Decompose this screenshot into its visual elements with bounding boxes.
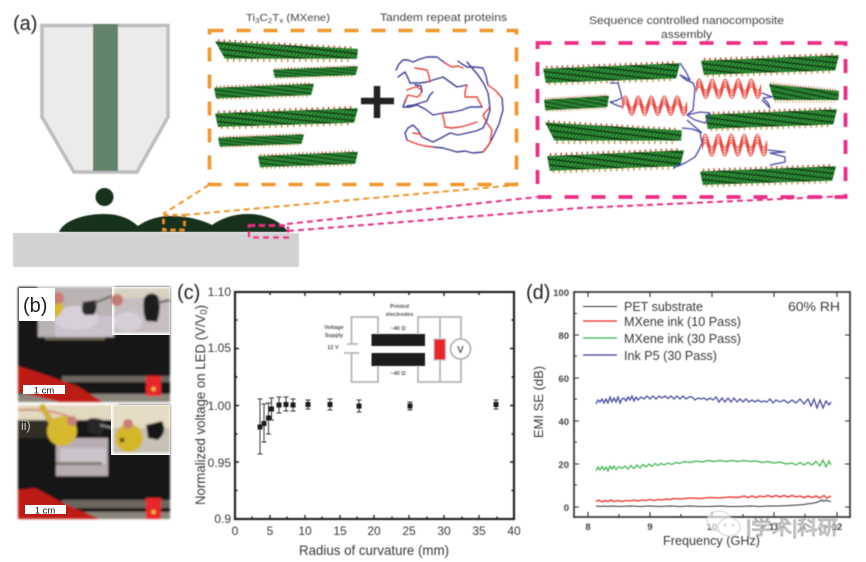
label b: (b) [23, 295, 47, 317]
y axis tick labels [208, 285, 231, 526]
circuit diagram inset: electrodes [386, 312, 413, 318]
x axis tick labels: 10 [707, 522, 717, 533]
y axis tick labels: 0 [564, 503, 569, 514]
panel label c: (c) [177, 282, 200, 304]
label b [19, 288, 55, 321]
panel c: voltage chart [177, 282, 521, 558]
x axis tick labels: 12 [832, 522, 842, 533]
data points with error bars [258, 397, 498, 454]
scale bar 1 cm [25, 505, 66, 516]
circuit diagram inset [324, 304, 470, 382]
y axis title: 0 [199, 309, 210, 315]
condition note: 60% RH [788, 299, 840, 314]
legend: MXene ink (10 Pass) [624, 315, 741, 329]
ink droplet [96, 188, 114, 206]
y axis tick labels: 100 [553, 288, 569, 299]
orange zoom box [164, 215, 184, 230]
nozzle [42, 24, 168, 172]
heading: MXene: T [272, 12, 280, 24]
x axis tick labels: 11 [769, 522, 780, 533]
y axis title: EMI SE (dB) [531, 366, 546, 438]
x axis tick labels: 0 [232, 524, 239, 538]
blue linkers [610, 63, 785, 168]
x axis title: Radius of curvature (mm) [299, 542, 449, 558]
heading: MXene: 3 [255, 16, 260, 25]
circuit diagram inset: ~40 Ω [390, 326, 406, 332]
series: Ink P5 30 pass [596, 396, 831, 408]
heading: MXene: Ti [246, 12, 254, 24]
watermark text: |学术|科研 [746, 517, 838, 539]
circuit diagram inset: ~40 Ω [390, 371, 406, 377]
panel label d: (d) [526, 282, 550, 304]
printed ink film [59, 214, 288, 232]
x axis tick labels: 40 [507, 524, 521, 538]
scale bar 1 cm: 1 cm [34, 386, 54, 396]
heading: MXene: x [279, 16, 284, 25]
y axis tick labels: 60 [558, 374, 569, 385]
heading: MXene: C [260, 12, 268, 24]
y axis tick labels [553, 288, 569, 514]
x axis tick labels: 5 [267, 524, 274, 538]
y axis tick labels: 1.05 [208, 341, 231, 355]
panel a: printing schematic and assembly [13, 12, 846, 267]
plus sign [361, 86, 394, 118]
scale bar 1 cm [23, 385, 65, 396]
y axis title: ) [192, 305, 208, 309]
x axis tick labels: 35 [472, 524, 486, 538]
circuit diagram inset: Supply [325, 333, 344, 339]
x axis tick labels [232, 524, 521, 538]
photo i [18, 287, 170, 402]
x axis tick labels: 15 [333, 524, 347, 538]
x axis tick labels: 25 [402, 524, 416, 538]
legend: PET substrate [624, 300, 703, 314]
heading: tandem repeat proteins: Tandem repeat proteins [380, 12, 508, 24]
orange dashed panel [210, 30, 516, 184]
circuit diagram inset: Voltage [324, 325, 344, 331]
y axis tick labels: 20 [558, 460, 569, 471]
orange connector lines [163, 185, 517, 215]
label ii: ii) [21, 419, 31, 433]
y axis tick labels: 40 [558, 417, 569, 428]
circuit diagram inset: Printed [390, 304, 409, 310]
x axis tick labels: 9 [647, 522, 653, 533]
series: PET substrate [596, 500, 831, 506]
pink connector lines [287, 196, 846, 231]
MXene sheets [214, 41, 358, 168]
y axis tick labels: 1.00 [208, 399, 231, 413]
panel b: photographs [18, 287, 170, 519]
x axis tick labels: 30 [437, 524, 451, 538]
legend: Ink P5 (30 Pass) [624, 349, 717, 363]
pink zoom box [249, 226, 288, 238]
series: MXene ink 10 pass [596, 496, 831, 502]
x axis title: Frequency (GHz) [663, 534, 760, 548]
photo ii [18, 405, 170, 519]
y axis tick labels: 80 [558, 331, 569, 342]
y axis tick labels: 0.95 [208, 456, 231, 470]
heading: nanocomposite assembly: Sequence controlled nanocomposite [589, 15, 784, 27]
inset photo ii [111, 405, 170, 455]
plot frame and ticks [235, 292, 514, 519]
legend: MXene ink (30 Pass) [624, 332, 741, 346]
inset photo i [111, 287, 170, 335]
heading: MXene: (MXene) [283, 12, 330, 24]
heading: nanocomposite assembly [589, 15, 784, 41]
circuit diagram inset: V [457, 345, 464, 356]
substrate [13, 233, 299, 267]
x axis tick labels: 20 [367, 524, 381, 538]
pink dashed panel [538, 43, 846, 197]
scale bar 1 cm: 1 cm [35, 506, 55, 516]
heading: MXene: 2 [268, 16, 272, 25]
x axis tick labels: 8 [585, 522, 591, 533]
y axis tick labels: 1.10 [208, 285, 231, 299]
y axis tick labels: 0.9 [214, 512, 231, 526]
nanocomposite sheets [543, 55, 839, 186]
panel d: EMI shielding chart [526, 282, 850, 548]
y axis title: Normalized voltage on LED (V/V [192, 303, 208, 505]
red repeat folds [622, 79, 767, 156]
circuit diagram inset: 12 V [327, 345, 339, 351]
plot frame and ticks [574, 292, 850, 517]
legend [583, 300, 741, 363]
icon: chat bubbles [707, 511, 740, 536]
tandem repeat protein coil [396, 57, 503, 153]
x axis tick labels: 10 [298, 524, 312, 538]
series: MXene ink 30 pass [596, 460, 831, 471]
heading: nanocomposite assembly: assembly [661, 29, 713, 41]
watermark [707, 511, 838, 539]
x axis tick labels [585, 522, 842, 533]
panel label a: (a) [13, 13, 37, 35]
